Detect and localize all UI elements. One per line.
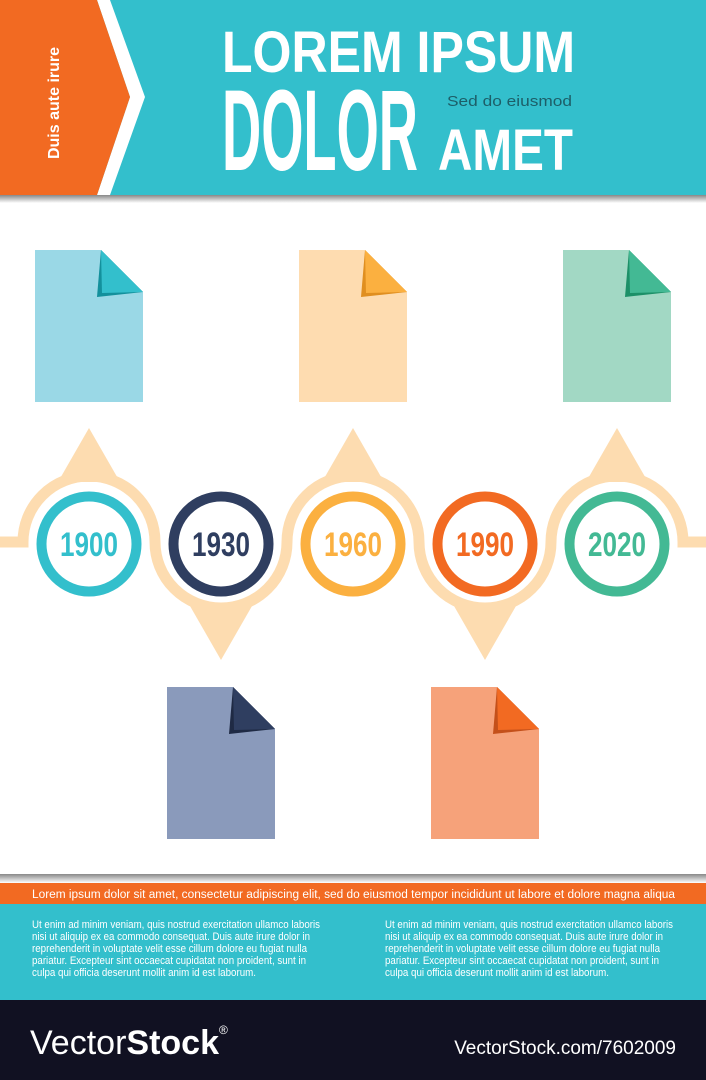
year circles: 2020 (588, 526, 646, 564)
year circles: 1990 (456, 526, 514, 564)
year circles: 1930 (192, 526, 250, 564)
document icons top (35, 250, 671, 402)
title: DOLOR (222, 67, 418, 195)
footer text columns: reprehenderit in voluptate velit esse cillum dolore eu fugiat nulla (385, 943, 661, 955)
document icons bottom (167, 687, 539, 839)
footer text columns: pariatur. Excepteur sint occaecat cupidatat non proident, sunt in (385, 955, 659, 967)
footer text columns: Ut enim ad minim veniam, quis nostrud exercitation ullamco laboris (32, 919, 320, 931)
subtitle: Sed do eiusmod (447, 93, 572, 110)
panel: orange chevron tab: Duis aute irure (46, 47, 63, 159)
title (222, 20, 575, 195)
watermark bar: VectorStock.com/7602009 (454, 1038, 676, 1059)
footer text columns: nisi ut aliquip ex ea commodo consequat. Duis aute irure dolor in (385, 931, 663, 943)
year circles (42, 496, 664, 592)
year circles: 1900 (60, 526, 118, 564)
watermark bar: VectorStock (30, 1024, 219, 1062)
footer text columns: nisi ut aliquip ex ea commodo consequat. Duis aute irure dolor in (32, 931, 310, 943)
footer text columns: Ut enim ad minim veniam, quis nostrud exercitation ullamco laboris (385, 919, 673, 931)
panel: orange chevron tab (0, 0, 130, 195)
footer text columns (0, 904, 706, 1000)
watermark bar (0, 1000, 706, 1080)
footer orange strip: Lorem ipsum dolor sit amet, consectetur adipiscing elit, sed do eiusmod tempor incididunt ut labore et dolore magna aliqua (32, 889, 676, 901)
year circles: 1960 (324, 526, 382, 564)
header band (0, 0, 706, 203)
footer text columns: culpa qui officia deserunt mollit anim id est laborum. (385, 967, 609, 979)
watermark bar: ® (219, 1023, 228, 1037)
title: LOREM IPSUM (222, 20, 575, 85)
title: AMET (438, 118, 573, 183)
footer text columns: reprehenderit in voluptate velit esse cillum dolore eu fugiat nulla (32, 943, 308, 955)
footer orange strip (0, 874, 706, 904)
timeline wave (0, 428, 706, 660)
footer text columns: pariatur. Excepteur sint occaecat cupidatat non proident, sunt in (32, 955, 306, 967)
footer text columns: culpa qui officia deserunt mollit anim id est laborum. (32, 967, 256, 979)
